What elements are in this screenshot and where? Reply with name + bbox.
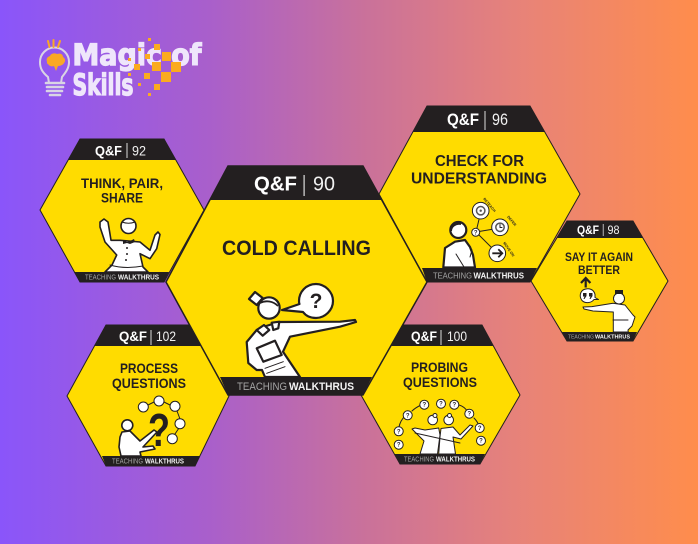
icon: teacher with question mark cycle: ? bbox=[148, 404, 170, 456]
question bubbles: ? bbox=[467, 412, 471, 418]
question bubbles: ? bbox=[406, 413, 410, 419]
footer label 96: WALKTHRUS bbox=[474, 270, 524, 280]
heading 96: CHECK FOR bbox=[435, 153, 524, 170]
question bubbles: ? bbox=[439, 402, 443, 408]
footer label 100: WALKTHRUS bbox=[436, 456, 475, 464]
panel: Q&F 100 Probing Questions bbox=[361, 325, 520, 464]
heading 92: THINK, PAIR, bbox=[81, 175, 163, 191]
header label 100: 100 bbox=[447, 328, 467, 344]
person right bbox=[415, 414, 473, 454]
heading 100: QUESTIONS bbox=[403, 374, 477, 390]
hexagon 92 bbox=[40, 139, 204, 282]
forearm lines bbox=[265, 362, 285, 373]
header label 100: Q&F bbox=[411, 328, 437, 344]
panel: Q&F 98 Say It Again Better bbox=[531, 221, 668, 341]
heading 98 bbox=[565, 252, 633, 277]
question bubbles: ? bbox=[478, 426, 482, 432]
header label 96: Q&F bbox=[447, 110, 479, 129]
icon: person shrugging bbox=[100, 218, 160, 272]
hexagon 90 bbox=[166, 166, 427, 395]
heading 102: QUESTIONS bbox=[112, 375, 186, 391]
panel: Q&F 92 Think, Pair, Share bbox=[40, 139, 204, 282]
header band 92 bbox=[68, 139, 176, 160]
teacher body and pointing arm bbox=[247, 320, 356, 377]
heading 92: SHARE bbox=[101, 190, 143, 206]
icon: up arrow bbox=[581, 278, 590, 288]
icon: thinker with decision options bbox=[443, 197, 517, 268]
person left bbox=[412, 414, 440, 454]
footer band 102 bbox=[102, 456, 200, 466]
question bubbles: ? bbox=[452, 403, 456, 409]
option: move on: MOVE ON bbox=[502, 241, 515, 258]
header label 102: 102 bbox=[156, 328, 176, 344]
footer band 98 bbox=[562, 332, 637, 341]
option: defer: DEFER bbox=[506, 215, 517, 227]
header label 92: 92 bbox=[132, 142, 146, 158]
footer label 90 bbox=[237, 381, 354, 393]
speech bubble with question mark: ? bbox=[310, 290, 322, 313]
footer label 92: TEACHING bbox=[85, 274, 116, 282]
header band 98 bbox=[557, 221, 643, 238]
heading 98: BETTER bbox=[578, 265, 621, 277]
thinker figure bbox=[443, 222, 475, 268]
heading 90: COLD CALLING bbox=[222, 237, 371, 260]
header label 90: 90 bbox=[313, 174, 335, 196]
header label 98 bbox=[577, 224, 620, 237]
header label 102 bbox=[119, 328, 176, 345]
footer label 90: TEACHING bbox=[237, 381, 287, 393]
footer band 90 bbox=[220, 377, 372, 395]
footer label 92: WALKTHRUS bbox=[118, 274, 159, 282]
header label 98: Q&F bbox=[577, 225, 599, 237]
question bubbles: ? bbox=[479, 439, 483, 445]
footer band 100 bbox=[394, 454, 485, 464]
header label 100 bbox=[411, 328, 467, 345]
icon: thinker with decision options: ? bbox=[474, 230, 478, 236]
header band 96 bbox=[413, 106, 545, 132]
panel: Q&F 96 Check for Understanding bbox=[379, 106, 580, 282]
footer label 102 bbox=[112, 458, 184, 466]
question bubbles: ? bbox=[397, 443, 401, 449]
header label 90: Q&F bbox=[254, 174, 297, 196]
book bbox=[257, 341, 282, 362]
icon: speech bubble with quote marks bbox=[580, 289, 598, 303]
heading 96 bbox=[411, 153, 547, 188]
teacher head bbox=[249, 292, 280, 319]
collar bbox=[257, 325, 269, 336]
heading 96: UNDERSTANDING bbox=[411, 170, 547, 188]
footer label 92 bbox=[85, 274, 159, 282]
footer band 92 bbox=[74, 272, 169, 282]
icon: two people with question bubbles bbox=[394, 399, 486, 454]
footer label 90: WALKTHRUS bbox=[289, 381, 354, 393]
hexagon 100 bbox=[361, 325, 520, 464]
logo wordmark: Magic of bbox=[72, 38, 202, 72]
footer label 100: TEACHING bbox=[404, 456, 434, 464]
header band 100 bbox=[387, 325, 493, 346]
footer label 102: TEACHING bbox=[112, 458, 143, 466]
logo: Magic of Skills bbox=[40, 38, 202, 102]
footer label 98 bbox=[568, 334, 630, 340]
hexagon 98 bbox=[531, 221, 668, 341]
heading 100: PROBING bbox=[411, 359, 468, 375]
header label 92 bbox=[95, 142, 146, 158]
header band 102 bbox=[94, 325, 205, 346]
collar right bbox=[272, 322, 279, 330]
footer label 98: WALKTHRUS bbox=[595, 334, 630, 340]
logo pixel squares bbox=[128, 38, 181, 96]
logo wordmark bbox=[72, 38, 202, 102]
footer band 96 bbox=[422, 268, 537, 282]
heading 100 bbox=[403, 359, 477, 390]
header label 90 bbox=[254, 174, 335, 196]
footer label 96: TEACHING bbox=[433, 270, 472, 280]
header label 98: 98 bbox=[608, 225, 620, 237]
footer label 98: TEACHING bbox=[568, 334, 594, 340]
header band 90 bbox=[210, 166, 382, 200]
header label 96 bbox=[447, 110, 508, 130]
question bubbles: ? bbox=[397, 429, 401, 435]
icon: light bulb with brain bbox=[40, 40, 69, 95]
question bubbles bbox=[394, 399, 486, 449]
footer label 102: WALKTHRUS bbox=[145, 458, 184, 466]
logo wordmark: Skills bbox=[72, 68, 134, 102]
icon: person gesturing bbox=[583, 290, 635, 332]
footer label 96 bbox=[433, 270, 524, 280]
heading 98: SAY IT AGAIN bbox=[565, 252, 633, 264]
icon: teacher with question mark cycle bbox=[119, 396, 185, 456]
question bubbles: ? bbox=[422, 403, 426, 409]
panel: Q&F 102 Process Questions bbox=[67, 325, 229, 466]
heading 102: PROCESS bbox=[120, 360, 178, 376]
footer label 100 bbox=[404, 456, 475, 464]
header label 96: 96 bbox=[492, 110, 508, 129]
icon: teacher pointing and asking bbox=[247, 284, 356, 377]
hexagon 102 bbox=[67, 325, 229, 466]
hexagon 96 bbox=[379, 106, 580, 282]
heading 92 bbox=[81, 175, 163, 206]
heading 102 bbox=[112, 360, 186, 391]
header label 92: Q&F bbox=[95, 142, 122, 158]
panel: Q&F 90 Cold Calling bbox=[166, 166, 427, 395]
header label 102: Q&F bbox=[119, 328, 147, 344]
option: reteach: RETEACH bbox=[482, 197, 497, 213]
